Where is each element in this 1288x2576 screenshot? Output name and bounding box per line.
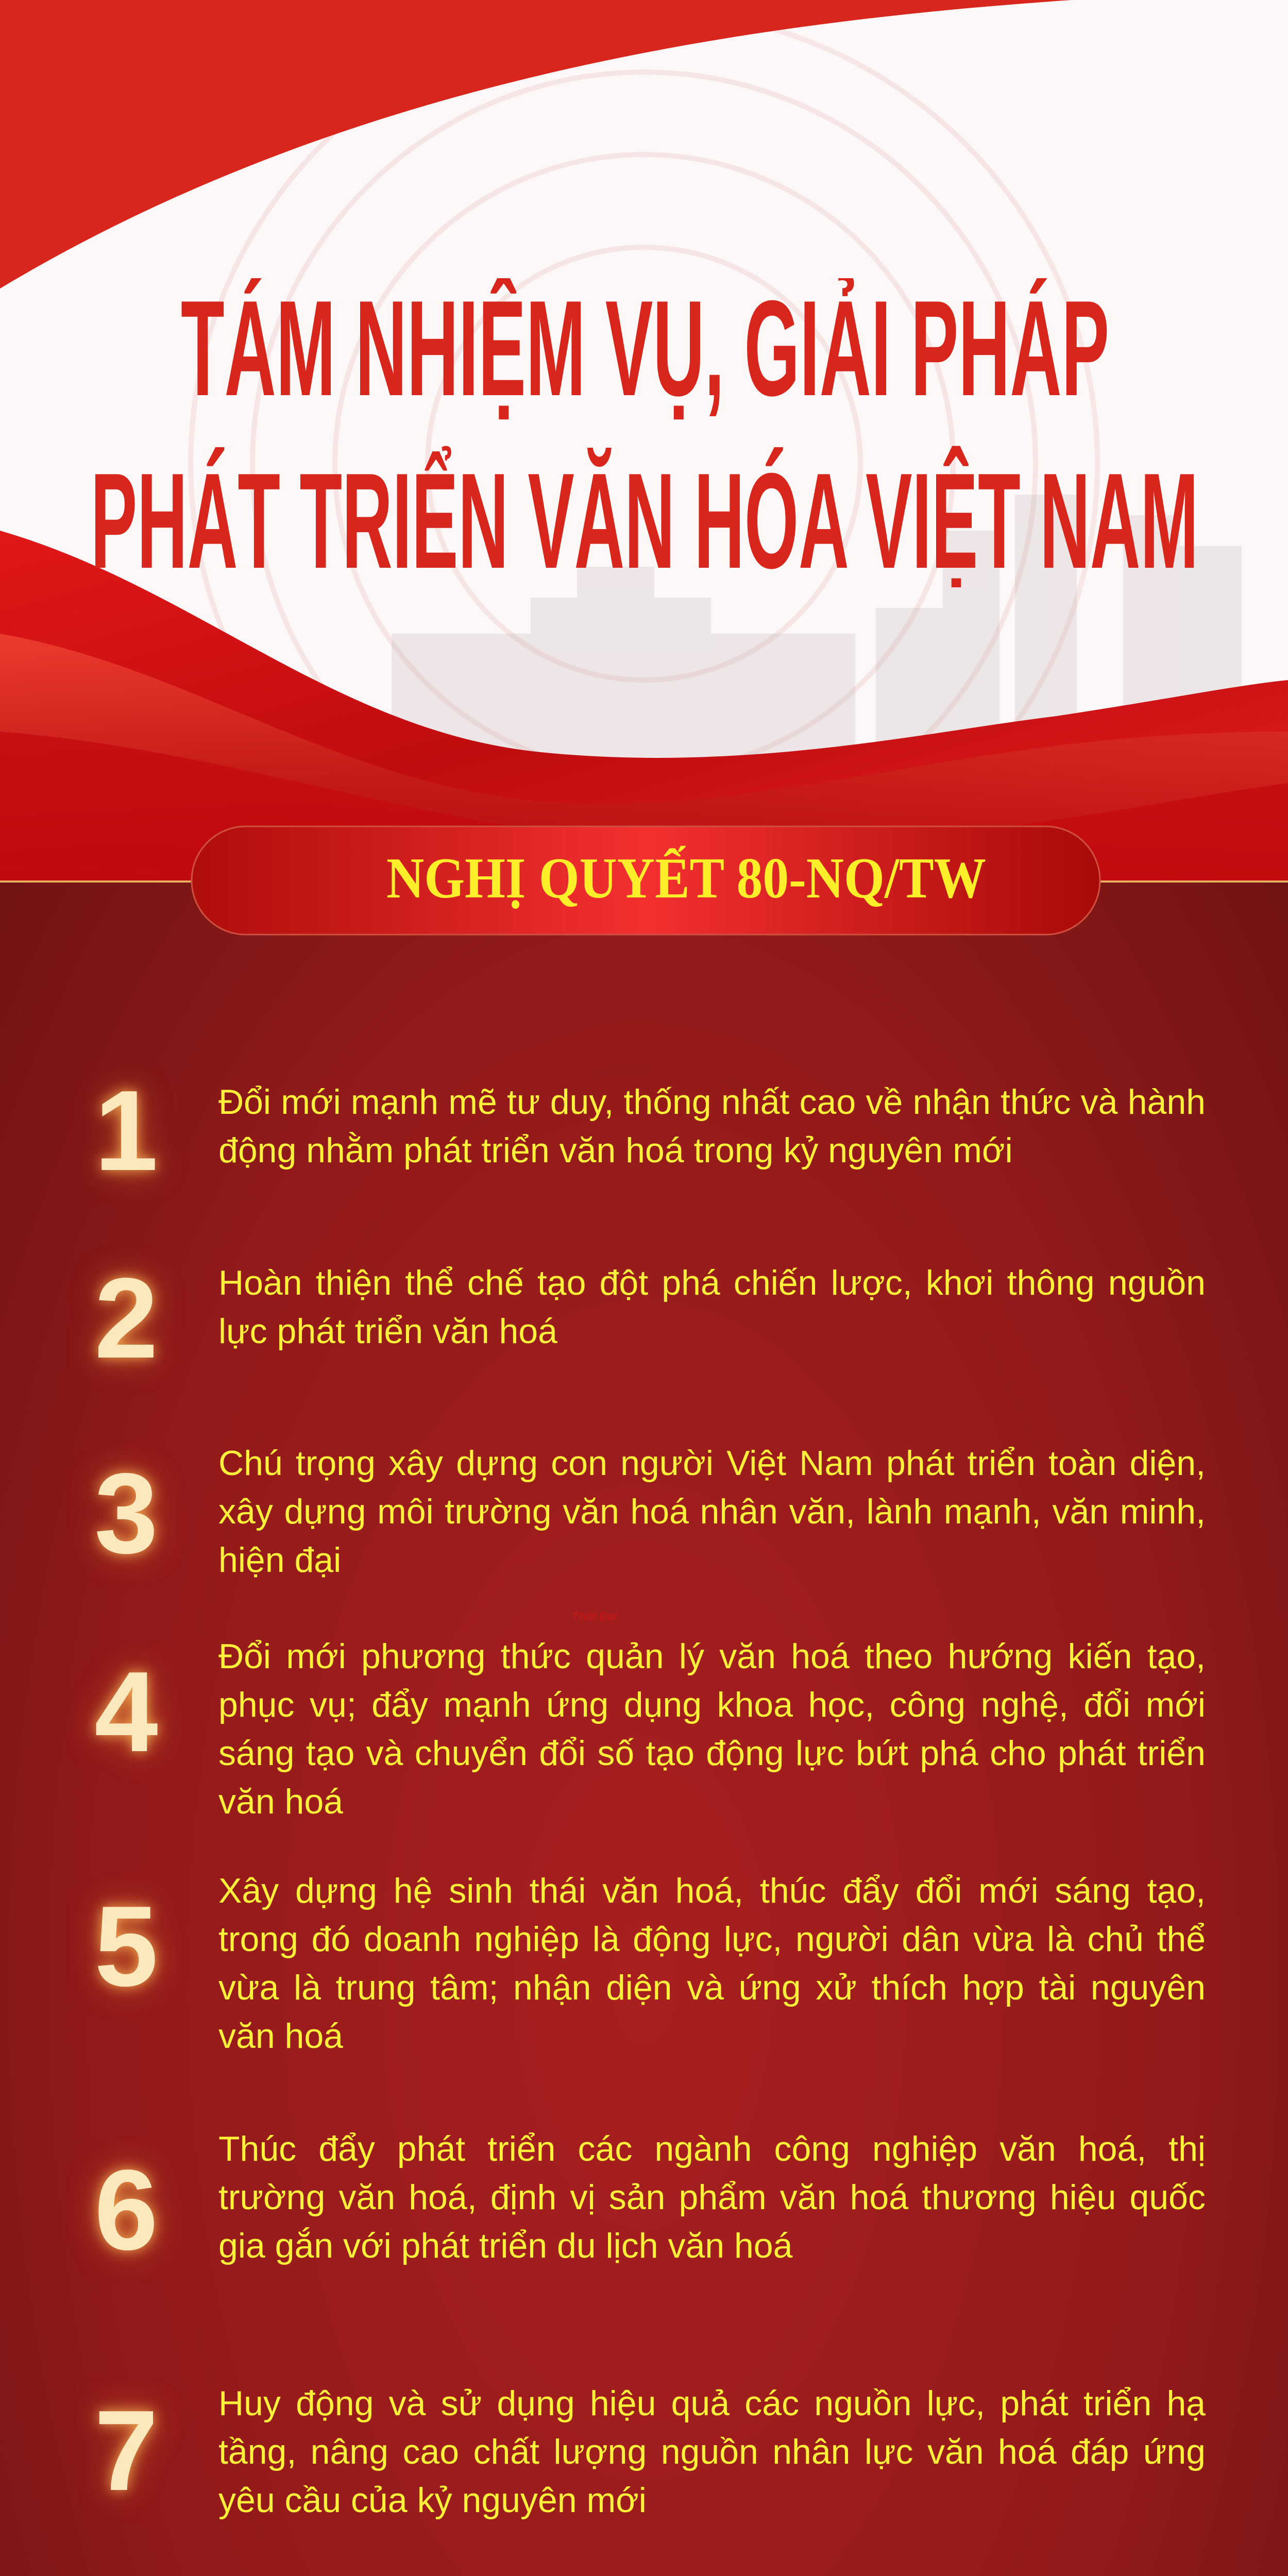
- text 7: [218, 2379, 1206, 2524]
- banner: resolution name: [191, 825, 1100, 936]
- text 3: xây dựng môi trường văn hoá nhân văn, lành mạnh, văn minh,: [218, 1492, 1206, 1531]
- item 7: [0, 2370, 1288, 2535]
- number 7: 7: [94, 2387, 158, 2515]
- text 6: [218, 2125, 1206, 2270]
- item 6: [0, 2112, 1288, 2287]
- text 4: sáng tạo và chuyển đổi số tạo động lực bứt phá cho phát triển: [218, 1734, 1206, 1773]
- main dark red background: [0, 882, 1288, 2576]
- text 4: phục vụ; đẩy mạnh ứng dụng khoa học, công nghệ, đổi mới: [218, 1685, 1206, 1724]
- number 4: 4: [94, 1648, 158, 1776]
- item 1: [91, 1067, 1206, 1195]
- text 5: văn hoá: [218, 2016, 343, 2056]
- text 2: [218, 1263, 1206, 1351]
- text 7: Huy động và sử dụng hiệu quả các nguồn lực, phát triển hạ: [218, 2384, 1206, 2423]
- number 2: 2: [94, 1255, 158, 1382]
- text 4: văn hoá: [218, 1782, 343, 1821]
- text 6: trường văn hoá, định vị sản phẩm văn hoá thương hiệu quốc: [218, 2178, 1206, 2217]
- text 5: [218, 1867, 1206, 2060]
- text 5: trong đó doanh nghiệp là động lực, người dân vừa là chủ thể: [218, 1920, 1206, 1959]
- text 3: hiện đại: [218, 1540, 341, 1580]
- text 5: Xây dựng hệ sinh thái văn hoá, thúc đẩy đổi mới sáng tạo,: [218, 1871, 1206, 1910]
- watermark: Thời Đại: [572, 1610, 617, 1623]
- text 7: yêu cầu của kỷ nguyên mới: [218, 2481, 647, 2520]
- text 7: tầng, nâng cao chất lượng nguồn nhân lực văn hoá đáp ứng: [218, 2432, 1206, 2471]
- text 2: Hoàn thiện thể chế tạo đột phá chiến lược, khơi thông nguồn: [218, 1263, 1206, 1302]
- ribbon: [0, 531, 1288, 882]
- cityscape: [392, 495, 1242, 757]
- header white area: [0, 0, 1288, 758]
- number 6: 6: [94, 2146, 158, 2274]
- text 1: động nhằm phát triển văn hoá trong kỷ nguyên mới: [218, 1131, 1013, 1170]
- item 2: [87, 1255, 1206, 1382]
- top-left red swoosh: [0, 0, 1072, 289]
- text 6: Thúc đẩy phát triển các ngành công nghiệp văn hoá, thị: [218, 2129, 1206, 2168]
- number 1: 1: [94, 1067, 158, 1195]
- text 5: vừa là trung tâm; nhận diện và ứng xử thích hợp tài nguyên: [218, 1968, 1206, 2007]
- text 4: [218, 1632, 1206, 1826]
- text 4: Đổi mới phương thức quản lý văn hoá theo hướng kiến tạo,: [218, 1637, 1206, 1676]
- title: [91, 278, 1198, 587]
- number 3: 3: [94, 1450, 158, 1578]
- item 3: [88, 1444, 1206, 1580]
- text 3: [218, 1444, 1206, 1580]
- number 5: 5: [94, 1883, 158, 2010]
- text 1: Đổi mới mạnh mẽ tư duy, thống nhất cao về nhận thức và hành: [218, 1082, 1206, 1122]
- banner: resolution name: NGHỊ QUYẾT 80-NQ/TW: [386, 846, 986, 910]
- item 4: [0, 1623, 1288, 1839]
- text 6: gia gắn với phát triển du lịch văn hoá: [218, 2226, 792, 2265]
- text 1: [218, 1082, 1206, 1170]
- text 3: Chú trọng xây dựng con người Việt Nam phát triển toàn diện,: [218, 1444, 1206, 1483]
- text 2: lực phát triển văn hoá: [218, 1312, 557, 1351]
- item 5: [0, 1855, 1288, 2071]
